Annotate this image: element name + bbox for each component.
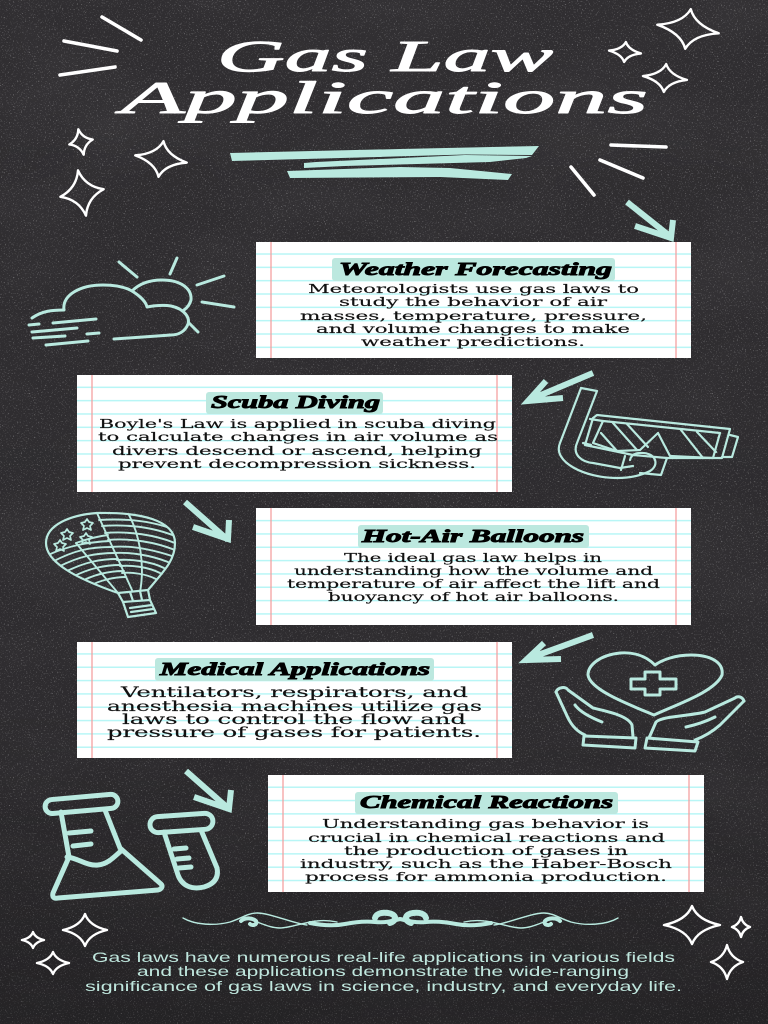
heading: hot-air balloons (358, 525, 589, 548)
arrow: weather to scuba (528, 373, 593, 401)
text: scuba body: to calculate changes in air volume as (98, 429, 498, 444)
heading: chemical reactions (355, 792, 618, 814)
heading: weather forecasting (332, 258, 615, 281)
text: weather body (300, 281, 647, 349)
text: weather body: and volume changes to make (316, 321, 630, 336)
chalk lines: top left (60, 17, 141, 75)
text: balloon body: temperature of air affect the lift and (287, 576, 660, 591)
icon: weather cloud and sun (29, 258, 234, 345)
text: scuba body: divers descend or ascend, helping (112, 443, 482, 458)
text: chemical body: crucial in chemical reactions and (308, 830, 665, 845)
ornamental divider (183, 913, 618, 928)
text: chemical body: industry, such as the Haber-Bosch (300, 856, 672, 871)
title: Gas Law (217, 32, 554, 81)
heading: hot-air balloons: Hot-Air Balloons (360, 526, 584, 546)
text: chemical body: Understanding gas behavior is (322, 816, 649, 831)
icon: snorkel mask (559, 388, 738, 478)
stars: top right (608, 5, 721, 94)
text: scuba body: Boyle's Law is applied in scuba diving (99, 416, 496, 431)
arrow: title to weather (627, 202, 673, 238)
panel: scuba diving (77, 375, 512, 492)
icon: heart and hands (556, 653, 744, 751)
closing text: significance of gas laws in science, industry, and everyday life. (85, 978, 682, 994)
text: weather body: Meteorologists use gas laws to (308, 281, 639, 296)
text: medical body: laws to control the flow and (122, 712, 466, 728)
closing text: Gas laws have numerous real-life applications in various fields (92, 949, 675, 965)
heading: scuba diving (206, 392, 383, 414)
text: weather body: weather predictions. (361, 334, 585, 349)
text: weather body: masses, temperature, pressure, (300, 308, 647, 323)
text: weather body: study the behavior of air (339, 294, 607, 309)
stars: bottom right (664, 906, 750, 979)
panel: chemical reactions (268, 775, 704, 892)
closing text (85, 949, 682, 994)
heading: weather forecasting: Weather Forecasting (339, 259, 612, 279)
text: medical body: anesthesia machines utilize gas (107, 699, 482, 715)
text: balloon body: buoyancy of hot air balloons. (328, 589, 619, 604)
arrow: medical to chemical (186, 771, 231, 809)
heading: medical applications: Medical Applications (158, 659, 430, 679)
panel: weather forecasting (256, 242, 691, 358)
stars: bottom left (22, 914, 107, 974)
arrow: scuba to balloon (185, 502, 229, 540)
stars: left (56, 127, 189, 219)
text: balloon body: understanding how the volume and (294, 563, 653, 578)
arrow: balloon to medical (526, 635, 593, 660)
text: chemical body: the production of gases in (344, 843, 628, 858)
heading: scuba diving: Scuba Diving (211, 392, 380, 412)
text: medical body (107, 685, 482, 741)
heading: chemical reactions: Chemical Reactions (360, 792, 613, 812)
text: balloon body: The ideal gas law helps in (344, 550, 602, 565)
closing text: and these applications demonstrate the wide-ranging (137, 963, 629, 979)
icon: hot-air balloon (46, 513, 175, 617)
title (114, 32, 648, 123)
text: chemical body: process for ammonia production. (305, 869, 667, 884)
panel: hot-air balloons (256, 508, 691, 625)
chalk lines: right (571, 145, 666, 195)
text: medical body: pressure of gases for patients. (107, 725, 481, 741)
panel: medical applications (77, 642, 512, 758)
text: scuba body (98, 416, 498, 471)
text: medical body: Ventilators, respirators, and (119, 685, 468, 701)
icon: flask and test tube (45, 794, 217, 898)
text: balloon body (287, 550, 660, 604)
text: scuba body: prevent decompression sickness. (118, 456, 476, 471)
title: Applications (114, 72, 648, 123)
mint scribble underline (230, 146, 539, 180)
heading: medical applications (155, 658, 434, 681)
text: chemical body (300, 816, 672, 884)
